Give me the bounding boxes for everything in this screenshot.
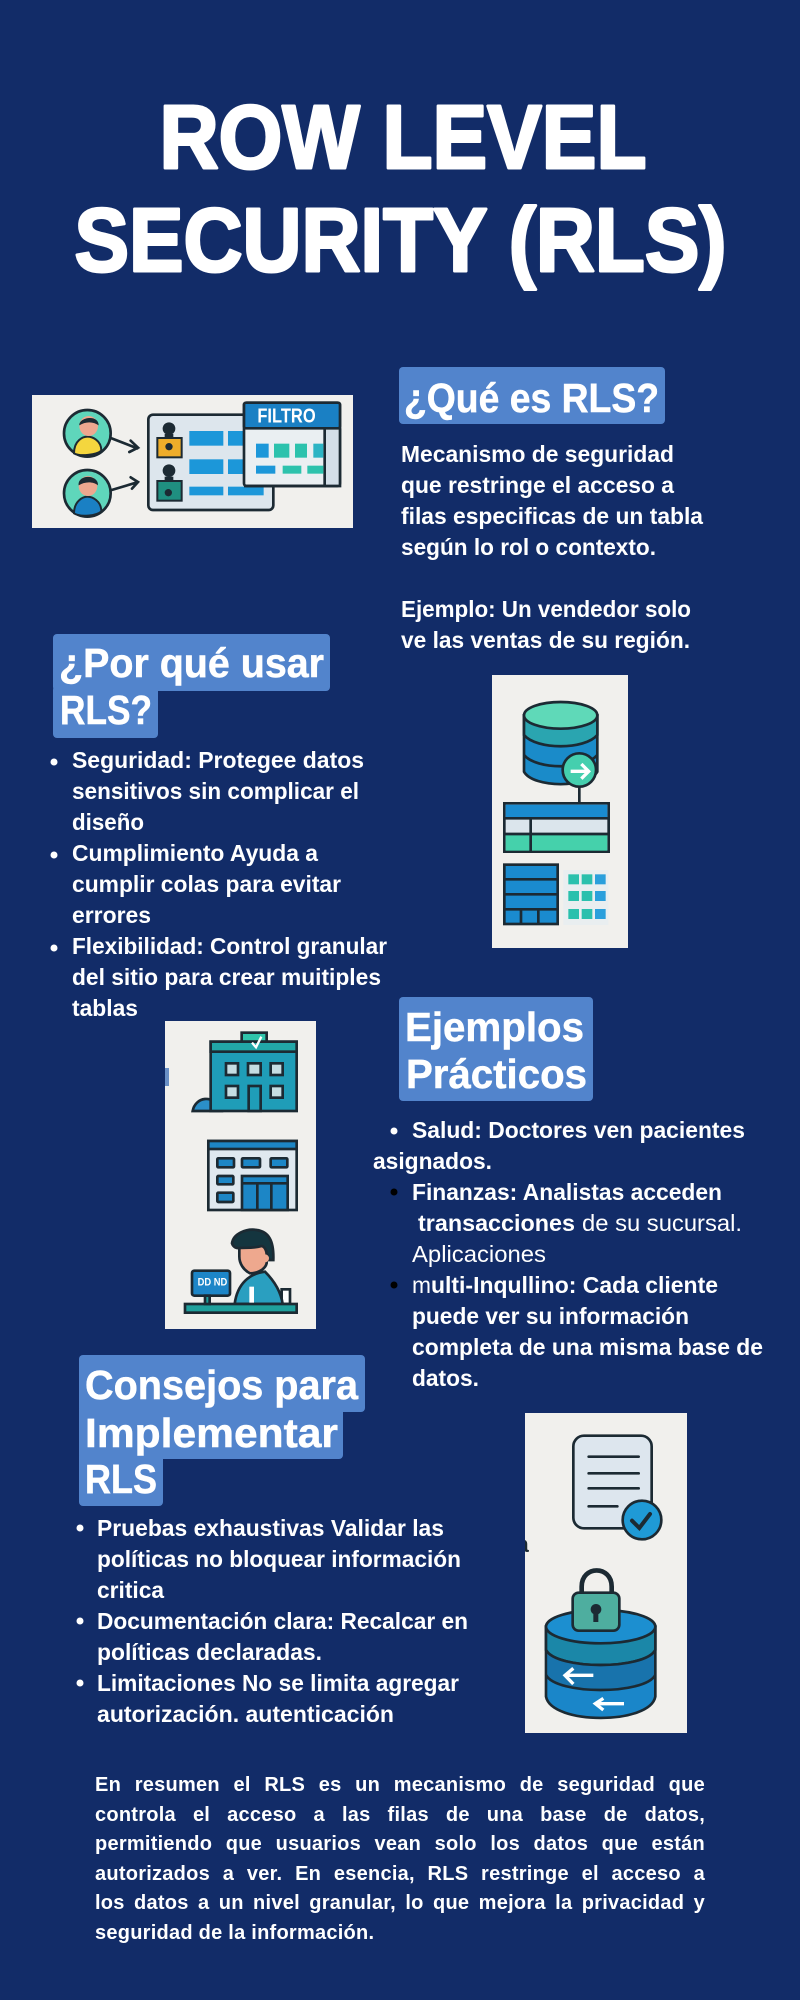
list: razones para usar RLS: Seguridad: Protegee datos [72, 747, 364, 773]
list: ejemplos practicos: Finanzas: Analistas acceden [412, 1179, 722, 1205]
title: ROW LEVEL [160, 88, 646, 188]
list: ejemplos practicos [373, 1117, 763, 1391]
list: ejemplos practicos: ulti-Inqullino: Cada cliente [431, 1272, 718, 1298]
list: consejos: autorización. autenticación [97, 1701, 394, 1727]
icon: table wide [504, 803, 609, 852]
list: consejos: políticas no bloquear información [97, 1546, 461, 1572]
list: ejemplos practicos: puede ver su información [412, 1303, 689, 1329]
icon: person at desk: DD ND [198, 1277, 227, 1289]
list: razones para usar RLS: Flexibilidad: Control granular [72, 933, 387, 959]
list: ejemplos practicos: asignados. [373, 1148, 492, 1174]
heading: Consejos para Implementar RLS: RLS [85, 1456, 157, 1502]
icon: bank building [208, 1141, 297, 1210]
illustration: document check and locked database: a [516, 1531, 529, 1557]
icon: person at desk [185, 1230, 297, 1313]
text block: resumen: autorizados a ver. En esencia, RLS restringe el acceso a [95, 1863, 705, 1885]
list: razones para usar RLS: Cumplimiento Ayuda a [72, 840, 318, 866]
list: consejos: políticas declaradas. [97, 1639, 322, 1665]
list: razones para usar RLS: tablas [72, 995, 138, 1021]
list: ejemplos practicos: transacciones [418, 1210, 575, 1236]
title: SECURITY (RLS) [74, 191, 726, 291]
list: consejos: Pruebas exhaustivas Validar las [97, 1515, 444, 1541]
heading: Ejemplos Practicos: Prácticos [406, 1051, 587, 1097]
text block: resumen: En resumen el RLS es un mecanismo de seguridad que [95, 1774, 705, 1796]
list: ejemplos practicos: Aplicaciones [412, 1241, 546, 1267]
data table [148, 415, 273, 510]
heading: Por que usar RLS: RLS? [60, 687, 152, 733]
icon: database with lock [546, 1570, 655, 1718]
text block: definicion y ejemplo: Ejemplo: Un vendedor solo [401, 596, 691, 622]
heading: Por que usar RLS [53, 634, 330, 738]
list: consejos [76, 1515, 468, 1727]
icon: hospital [193, 1033, 297, 1111]
icon: grid of squares [563, 870, 608, 925]
illustration: buildings and person [165, 1021, 316, 1329]
text block: resumen: permitiendo que usuarios vean solo los datos que están [95, 1833, 705, 1855]
title [74, 88, 726, 291]
list: ejemplos practicos: de su sucursal. [582, 1210, 742, 1236]
list: ejemplos practicos: m [412, 1272, 431, 1298]
heading: Consejos para Implementar RLS: Implementar [85, 1410, 338, 1456]
icon: database with arrow [524, 702, 597, 803]
filter panel: FILTRO [257, 405, 316, 427]
heading: Consejos para Implementar RLS: Consejos para [85, 1362, 359, 1408]
list: consejos: critica [97, 1577, 164, 1603]
text block: definicion y ejemplo [401, 441, 703, 653]
text block: resumen: los datos a un nivel granular, lo que mejora la privacidad y [95, 1892, 705, 1914]
heading: Consejos para Implementar RLS [79, 1355, 365, 1506]
icon: user yellow [64, 410, 111, 457]
heading: Por que usar RLS: ¿Por qué usar [59, 640, 324, 686]
text block: definicion y ejemplo: según lo rol o contexto. [401, 534, 656, 560]
heading: Ejemplos Practicos: Ejemplos [405, 1004, 584, 1050]
illustration: document check and locked database [510, 1413, 687, 1733]
list: razones para usar RLS [50, 747, 387, 1021]
arrow: user one to table [112, 438, 138, 452]
icon: document with check [573, 1436, 661, 1539]
text block: resumen [95, 1774, 705, 1944]
text block: resumen: controla el acceso a las filas de una base de datos, [95, 1804, 705, 1826]
text block: resumen: seguridad de la información. [95, 1922, 374, 1944]
list: razones para usar RLS: cumplir colas para evitar [72, 871, 341, 897]
text block: definicion y ejemplo: filas especificas de un tabla [401, 503, 703, 529]
list: razones para usar RLS: diseño [72, 809, 144, 835]
heading: Que es RLS: ¿Qué es RLS? [404, 375, 659, 421]
list: consejos: Documentación clara: Recalcar en [97, 1608, 468, 1634]
list: ejemplos practicos: datos. [412, 1365, 479, 1391]
filter panel [244, 403, 340, 486]
arrow: user two to table [112, 477, 138, 490]
icon: user blue [64, 470, 111, 517]
list: razones para usar RLS: del sitio para crear muitiples [72, 964, 381, 990]
icon: table blue [504, 865, 558, 924]
heading: Ejemplos Practicos [399, 997, 593, 1101]
list: ejemplos practicos: Salud: Doctores ven pacientes [412, 1117, 745, 1143]
text block: definicion y ejemplo: que restringe el acceso a [401, 472, 674, 498]
list: ejemplos practicos: completa de una misma base de [412, 1334, 763, 1360]
text block: definicion y ejemplo: ve las ventas de su región. [401, 627, 690, 653]
list: razones para usar RLS: sensitivos sin complicar el [72, 778, 359, 804]
list: razones para usar RLS: errores [72, 902, 151, 928]
illustration: users filtered by lock to table rows [32, 395, 353, 528]
text block: definicion y ejemplo: Mecanismo de seguridad [401, 441, 674, 467]
list: consejos: Limitaciones No se limita agregar [97, 1670, 459, 1696]
illustration: database and tables [492, 675, 628, 948]
